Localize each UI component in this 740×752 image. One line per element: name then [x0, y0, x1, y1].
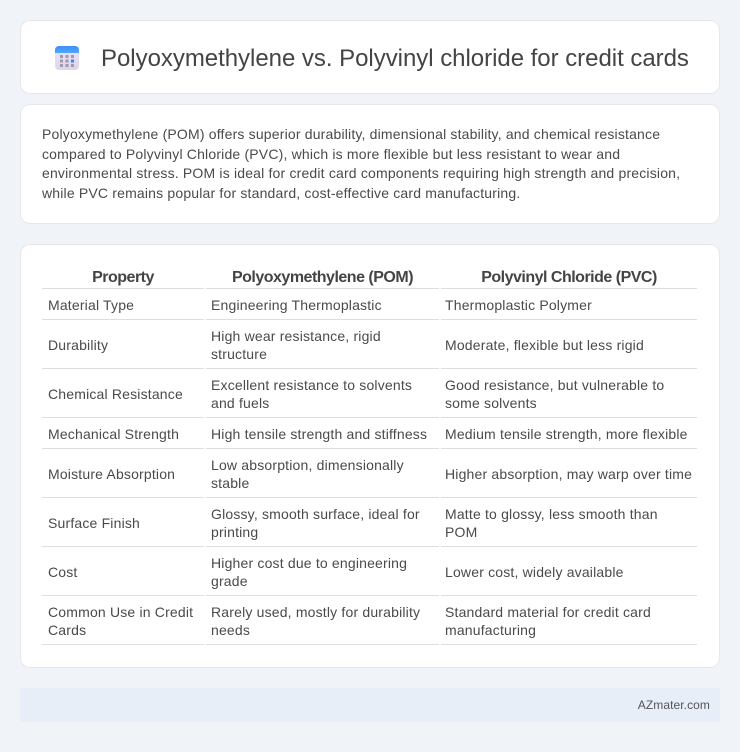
comparison table: Engineering Thermoplastic	[211, 297, 382, 313]
comparison table: Low absorption, dimensionally	[211, 457, 404, 473]
comparison table: Glossy, smooth surface, ideal for	[211, 506, 420, 522]
text block: summary paragraph: environmental stress. POM is ideal for credit card components requiring high strength and precision,	[42, 165, 680, 181]
text block: summary paragraph	[42, 126, 680, 201]
panel: summary	[20, 104, 720, 224]
comparison table: Rarely used, mostly for durability	[211, 604, 420, 620]
comparison table: Cost	[48, 564, 78, 580]
comparison table: Excellent resistance to solvents	[211, 377, 412, 393]
comparison table: High wear resistance, rigid	[211, 328, 381, 344]
comparison table	[42, 269, 697, 645]
panel: comparison table	[20, 244, 720, 668]
comparison table: Chemical Resistance	[48, 386, 183, 402]
header: Polyoxymethylene (POM): Polyoxymethylene (POM)	[232, 269, 413, 286]
footer bar	[20, 688, 720, 722]
comparison table: Material Type	[48, 297, 134, 313]
comparison table: Thermoplastic Polymer	[445, 297, 592, 313]
panel: title card	[20, 20, 720, 94]
comparison table: needs	[211, 622, 250, 638]
comparison table: Moisture Absorption	[48, 466, 175, 482]
comparison table: structure	[211, 346, 267, 362]
title: Polyoxymethylene vs. Polyvinyl chloride for credit cards	[101, 45, 689, 72]
comparison table: Lower cost, widely available	[445, 564, 624, 580]
header: Property: Property	[92, 269, 154, 286]
row: Surface Finish	[48, 506, 658, 540]
comparison table: Moderate, flexible but less rigid	[445, 337, 644, 353]
row: Common Use in Credit Cards	[48, 604, 651, 638]
comparison table: High tensile strength and stiffness	[211, 426, 427, 442]
text block: summary paragraph: Polyoxymethylene (POM) offers superior durability, dimensional stability, and chemical resistance	[42, 126, 660, 142]
comparison table: Common Use in Credit	[48, 604, 193, 620]
row: Cost	[48, 555, 624, 589]
comparison table: Mechanical Strength	[48, 426, 179, 442]
comparison table: Durability	[48, 337, 108, 353]
comparison table: POM	[445, 524, 477, 540]
row: Durability	[48, 328, 644, 362]
comparison table: Matte to glossy, less smooth than	[445, 506, 658, 522]
comparison table: printing	[211, 524, 258, 540]
comparison table: Medium tensile strength, more flexible	[445, 426, 688, 442]
comparison table: Good resistance, but vulnerable to	[445, 377, 664, 393]
icon: calendar grid	[55, 46, 79, 70]
row: Chemical Resistance	[48, 377, 664, 411]
text block: summary paragraph: compared to Polyvinyl Chloride (PVC), which is more flexible but less resistant to wear and	[42, 146, 620, 162]
comparison table: some solvents	[445, 395, 537, 411]
comparison table: Higher absorption, may warp over time	[445, 466, 692, 482]
footer credit: AZmater.com	[638, 698, 710, 712]
header: Polyvinyl Chloride (PVC): Polyvinyl Chloride (PVC)	[481, 269, 657, 286]
comparison table: grade	[211, 573, 248, 589]
row: Mechanical Strength	[48, 426, 688, 442]
comparison table: and fuels	[211, 395, 269, 411]
text block: summary paragraph: while PVC remains popular for standard, cost-effective card manufacturing.	[42, 184, 520, 200]
comparison table: Higher cost due to engineering	[211, 555, 407, 571]
row: Moisture Absorption	[48, 457, 692, 491]
row: Material Type	[48, 297, 592, 313]
comparison table: Standard material for credit card	[445, 604, 651, 620]
comparison table: Cards	[48, 622, 86, 638]
comparison table: stable	[211, 475, 249, 491]
comparison table: manufacturing	[445, 622, 536, 638]
comparison table: Surface Finish	[48, 515, 140, 531]
